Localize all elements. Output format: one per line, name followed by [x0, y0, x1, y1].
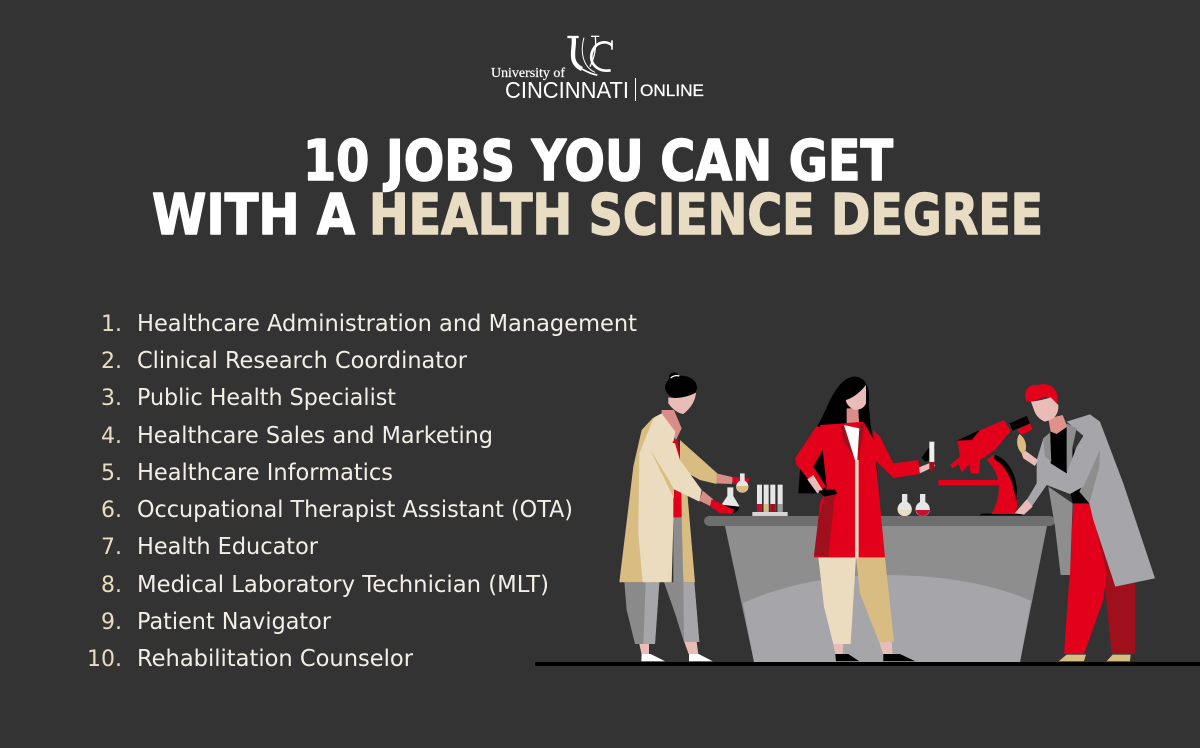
- numbered job list: 4.: [101, 424, 122, 449]
- numbered job list: 9.: [101, 610, 122, 635]
- numbered job list: 7.: [101, 535, 122, 560]
- ankles: [833, 644, 843, 654]
- text: Online: ONLINE: [640, 82, 704, 100]
- text: Cincinnati: CINCINNATI: [505, 77, 629, 103]
- numbered job list: 5.: [101, 461, 122, 486]
- arm right: [873, 430, 920, 478]
- shirt: [844, 425, 859, 460]
- numbered job list: 6.: [101, 498, 122, 523]
- numbered job list: 2.: [101, 349, 122, 374]
- numbered job list: Healthcare Administration and Management: [137, 311, 637, 337]
- shoes: [641, 654, 665, 661]
- glove: [710, 499, 735, 513]
- lapel and near arm: [1027, 420, 1100, 507]
- hair: [798, 377, 878, 493]
- numbered job list: Rehabilitation Counselor: [137, 646, 414, 672]
- flasks on the table: [898, 494, 930, 516]
- hands: [1020, 448, 1038, 466]
- face: [846, 385, 866, 410]
- neck: [1048, 415, 1067, 434]
- test tube rack: [752, 485, 788, 516]
- hair: [1025, 384, 1058, 403]
- arm near: [660, 440, 702, 502]
- numbered job list: Medical Laboratory Technician (MLT): [137, 572, 549, 598]
- ankles: [639, 644, 649, 655]
- shirt: [1051, 427, 1089, 503]
- hair: [665, 376, 697, 399]
- shirt: [673, 438, 681, 460]
- numbered job list: Public Health Specialist: [137, 385, 396, 411]
- numbered job list: Health Educator: [137, 534, 319, 560]
- numbered job list: Healthcare Informatics: [137, 460, 393, 486]
- numbered job list: Occupational Therapist Assistant (OTA): [137, 497, 573, 523]
- hand and test tube held by middle scientist: [922, 442, 935, 471]
- text: University of: University of: [491, 65, 566, 80]
- neck: [847, 408, 859, 428]
- person: left scientist in cream coat: [619, 372, 749, 661]
- coat: [1067, 414, 1155, 587]
- ground line: [535, 662, 1200, 666]
- pants: [818, 557, 856, 644]
- lapels: [841, 425, 856, 458]
- face: [1031, 397, 1058, 422]
- flask bottom: [722, 487, 739, 512]
- numbered job list: 10.: [87, 647, 122, 672]
- title: WITH A: [152, 183, 356, 248]
- numbered job list: 8.: [101, 573, 122, 598]
- coat back panel: [1048, 487, 1073, 575]
- coat: [814, 422, 885, 557]
- icon: UC monogram: [567, 36, 612, 75]
- neck: [662, 410, 682, 440]
- coat: [619, 417, 657, 582]
- illustration: scientists in a lab: [535, 372, 1200, 666]
- face: [668, 393, 696, 414]
- person: right scientist in grey coat: [1015, 384, 1155, 661]
- arm left: [795, 426, 833, 492]
- coat fold: [650, 449, 674, 498]
- divider: [635, 78, 636, 101]
- pants: [673, 517, 683, 583]
- shoes: [1059, 655, 1086, 661]
- title: [152, 129, 1043, 248]
- microscope: [938, 416, 1033, 515]
- numbered job list: 3.: [101, 386, 122, 411]
- numbered job list: [87, 311, 637, 672]
- numbered job list: Healthcare Sales and Marketing: [137, 423, 493, 449]
- lab table: [704, 516, 1055, 662]
- person: middle scientist in red coat: [795, 377, 935, 661]
- numbered job list: 1.: [101, 312, 122, 337]
- shoes: [835, 654, 859, 661]
- flask top: [736, 473, 748, 493]
- title: 10 JOBS YOU CAN GET: [303, 129, 893, 194]
- title: HEALTH SCIENCE DEGREE: [369, 183, 1043, 248]
- arm far: [680, 440, 717, 484]
- logo: University of Cincinnati Online: [491, 36, 704, 103]
- trousers: [1090, 503, 1135, 654]
- numbered job list: Clinical Research Coordinator: [137, 348, 468, 374]
- numbered job list: Patient Navigator: [137, 609, 332, 635]
